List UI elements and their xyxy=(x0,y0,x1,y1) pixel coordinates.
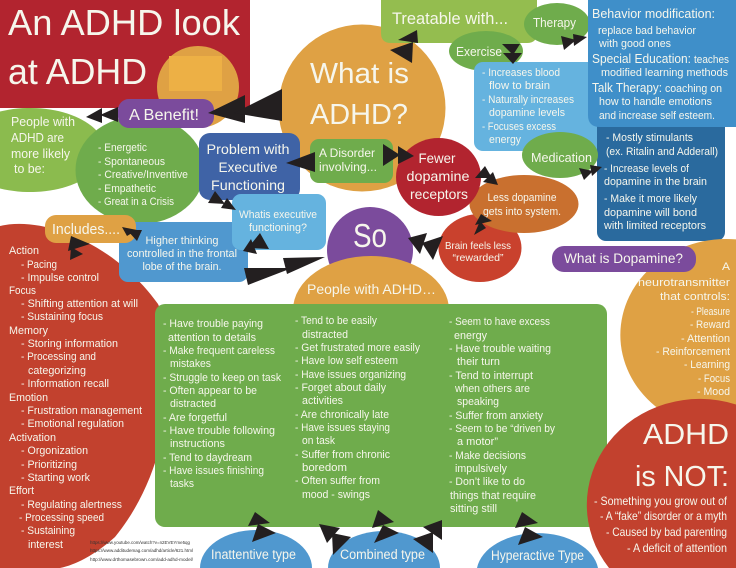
symptoms column: hyperactive: when others are xyxy=(454,383,530,395)
panel: red functions list: - Sustaining focus xyxy=(21,311,103,323)
symptoms column: combined: - Have issues organizing xyxy=(295,369,406,381)
panel: therapy types xyxy=(588,0,736,127)
bubble: less dopamine xyxy=(470,175,578,233)
arrow: brain to so xyxy=(408,233,443,260)
panel: a disorder involving xyxy=(310,139,393,183)
panel: red functions list: Focus xyxy=(9,285,36,297)
panel: therapy types: Talk Therapy: xyxy=(592,80,662,95)
panel: red functions list: - Emotional regulation xyxy=(21,418,124,430)
panel: red functions list: - Orgonization xyxy=(21,445,88,457)
panel: neurotransmitter list: - Focus xyxy=(698,373,730,385)
bubble: brain feels less rewarded: “rewarded” xyxy=(452,252,504,264)
panel: red functions list: Effort xyxy=(9,485,35,497)
symptoms column: combined: on task xyxy=(302,435,335,447)
arrow: higher thinking to so xyxy=(244,257,325,285)
panel: therapy types: Behavior modification: xyxy=(592,6,715,21)
arrow: medication to details xyxy=(579,165,602,180)
panel: higher thinking: Higher thinking xyxy=(146,235,218,247)
panel: medication details xyxy=(597,115,725,241)
symptoms column: inattentive: - Make frequent careless xyxy=(163,345,275,357)
arrow: combined to hyperactive column xyxy=(413,520,442,553)
panel: red functions list: - Prioritizing xyxy=(21,459,77,471)
bubble: hyperactive type xyxy=(477,533,598,568)
panel: medication details: with limited receptors xyxy=(603,220,706,232)
panel: medication details: - Increase levels of xyxy=(604,163,690,175)
bubble: inattentive type: Inattentive type xyxy=(211,547,296,562)
panel: red functions list: - Impulse control xyxy=(21,272,99,284)
symptoms column: inattentive: - Have trouble following xyxy=(163,425,275,437)
panel: therapy types: replace bad behavior xyxy=(598,25,696,37)
arrow: inattentive to symptoms xyxy=(248,512,276,542)
symptoms column: inattentive: - Are forgetful xyxy=(163,412,227,424)
symptoms column: inattentive: - Have trouble paying xyxy=(163,318,263,330)
panel: problem with executive functioning: Problem with xyxy=(206,141,290,157)
symptoms column: inattentive: - Often appear to be xyxy=(163,385,257,397)
bubble: fewer dopamine receptors: receptors xyxy=(410,186,468,202)
bubble: so: So xyxy=(353,217,387,254)
panel: traits list: - Great in a Crisis xyxy=(98,196,174,208)
panel: symptoms xyxy=(155,304,607,527)
panel: neurotransmitter list: - Learning xyxy=(684,359,730,371)
arrow: combined to inattentive column xyxy=(319,524,351,555)
arrow: executive functioning question xyxy=(208,191,236,210)
panel: red functions list: - Information recall xyxy=(21,378,109,390)
panel: exercise benefits: energy xyxy=(489,134,521,146)
symptoms column: inattentive: instructions xyxy=(170,438,225,450)
panel: what is ADHD: ADHD? xyxy=(310,99,408,131)
label: what is dopamine xyxy=(552,246,696,272)
symptoms column: combined: boredom xyxy=(302,462,347,474)
bubble: fewer dopamine receptors xyxy=(396,138,481,216)
arrow: disorder to executive functioning xyxy=(286,152,315,172)
panel: neurotransmitter list: - Reinforcement xyxy=(656,346,731,358)
bubble: inattentive type xyxy=(200,530,312,568)
panel: medication details: (ex. Ritalin and Adderall) xyxy=(606,146,718,158)
panel: a disorder involving: involving... xyxy=(319,162,377,174)
arrow: question to higher thinking xyxy=(243,233,269,254)
symptoms column: combined xyxy=(295,315,420,501)
symptoms column: inattentive: - Tend to daydream xyxy=(163,452,252,464)
bubble: fewer dopamine receptors: Fewer xyxy=(418,150,456,166)
panel: red functions list: - Frustration management xyxy=(21,405,143,417)
panel: traits list: - Creative/Inventive xyxy=(98,169,188,181)
panel: people with ADHD are more likely to be: ADHD are xyxy=(11,131,64,145)
panel: traits list: - Spontaneous xyxy=(98,156,165,168)
symptoms column: hyperactive: - Make decisions xyxy=(449,450,526,462)
panel: higher thinking: lobe of the brain. xyxy=(142,261,222,273)
panel: people with ADHD are more likely to be: to be: xyxy=(14,162,45,176)
bubble: fewer dopamine receptors: dopamine xyxy=(406,168,470,184)
arrow: combined to column center xyxy=(372,510,399,543)
panel: ADHD is not: is NOT: xyxy=(635,461,729,493)
source links: http://www.drthomasebrown.com/add-adhd-model/ xyxy=(90,557,194,562)
bubble: people with ADHD xyxy=(293,256,449,364)
arrow: hyperactive to symptoms xyxy=(515,512,543,545)
panel: medication details: - Make it more likely xyxy=(604,193,697,205)
symptoms column: combined: - Suffer from chronic xyxy=(295,449,390,461)
symptoms column: inattentive: tasks xyxy=(170,478,194,490)
arrow: exercise to benefits xyxy=(502,44,522,64)
panel: what is executive functioning: Whatis executive xyxy=(239,209,317,221)
symptoms column: hyperactive: - Suffer from anxiety xyxy=(449,410,543,422)
label: a benefit xyxy=(118,99,214,128)
panel: red functions list: - Processing and xyxy=(21,351,96,363)
symptoms column: hyperactive: sitting still xyxy=(450,503,497,515)
bubble: so xyxy=(327,207,413,293)
bubble: less dopamine: Less dopamine xyxy=(488,192,556,204)
symptoms column: hyperactive: - Have trouble waiting xyxy=(449,343,551,355)
source links xyxy=(90,540,194,562)
symptoms column: hyperactive: a motor” xyxy=(457,436,498,448)
panel: red functions list: Action xyxy=(9,245,39,257)
panel: therapy types: and increase self esteem. xyxy=(599,110,715,122)
bubble: brain feels less rewarded: Brain feels less xyxy=(445,240,511,252)
symptoms column: hyperactive: energy xyxy=(454,330,487,342)
panel: exercise benefits: - Naturally increases xyxy=(482,94,574,106)
symptoms column: inattentive: - Have issues finishing xyxy=(163,465,264,477)
panel: red functions list: interest xyxy=(28,539,64,551)
label: what is dopamine: What is Dopamine? xyxy=(564,250,683,266)
panel: neurotransmitter list: - Attention xyxy=(681,333,730,345)
symptoms column: combined: - Have issues staying xyxy=(295,422,390,434)
panel: higher thinking xyxy=(119,222,248,282)
panel: neurotransmitter list xyxy=(620,239,736,431)
arrow: includes to higher thinking xyxy=(122,227,142,241)
panel: exercise benefits xyxy=(474,62,604,151)
panel: problem with executive functioning xyxy=(199,133,300,200)
panel: red functions list: - Storing information xyxy=(21,338,118,350)
symptoms column: inattentive: - Struggle to keep on task xyxy=(163,372,281,384)
panel: red functions list: Emotion xyxy=(9,392,48,404)
panel: medication details: - Mostly stimulants xyxy=(606,132,693,144)
panel: neurotransmitter list: - Mood xyxy=(697,386,730,398)
symptoms column: combined: mood - swings xyxy=(302,489,370,501)
panel: people with ADHD are more likely to be: more likely xyxy=(11,147,71,161)
arrow: includes to red list xyxy=(68,236,90,260)
panel: therapy types: with good ones xyxy=(598,38,671,50)
bubble: therapy: Therapy xyxy=(533,16,577,30)
panel: neurotransmitter list: A xyxy=(722,261,730,273)
bubble: hyperactive type: Hyperactive Type xyxy=(491,548,584,563)
panel: ADHD is not: - A deficit of attention xyxy=(627,541,727,555)
panel: ADHD is not xyxy=(587,399,736,568)
panel: red functions list: - Processing speed xyxy=(19,512,104,524)
symptoms column: inattentive xyxy=(163,318,281,490)
panel: therapy types: teaches xyxy=(694,54,729,66)
bubble: combined type xyxy=(328,531,440,568)
source links: https://www.youtube.com/watch?v=n2EVEYme5qg xyxy=(90,540,190,545)
panel: what is ADHD: What is xyxy=(310,58,409,90)
panel: traits list: - Energetic xyxy=(98,142,147,154)
symptoms column: hyperactive: - Seem to have excess xyxy=(449,316,550,328)
symptoms column: combined: activities xyxy=(302,395,343,407)
symptoms column: combined: - Forget about daily xyxy=(295,382,386,394)
arrow: fewer receptors to less dopamine xyxy=(475,166,498,185)
panel: a disorder involving: A Disorder xyxy=(319,148,375,160)
symptoms column: inattentive: mistakes xyxy=(170,358,211,370)
symptoms column: inattentive: attention to details xyxy=(168,332,256,344)
panel: red functions list: - Shifting attention at will xyxy=(21,298,138,310)
panel: problem with executive functioning: Executive xyxy=(218,159,278,175)
symptoms column: combined: - Tend to be easily xyxy=(295,315,377,327)
panel: what is ADHD xyxy=(278,24,446,192)
panel: what is executive functioning xyxy=(232,194,326,250)
arrow: a benefit to people with ADHD xyxy=(86,107,118,123)
panel: medication details: dopamine in the brain xyxy=(604,176,707,188)
source links: https://www.additudemag.com/adhd/article/621.html xyxy=(90,548,193,553)
arrow: less dopamine to brain xyxy=(474,214,492,235)
title panel xyxy=(0,0,250,128)
panel: therapy types: coaching on xyxy=(665,83,722,95)
panel: traits list: - Empathetic xyxy=(98,183,156,195)
symptoms column: hyperactive xyxy=(449,316,555,515)
bubble: exercise: Exercise xyxy=(456,45,502,59)
arrow: disorder to fewer receptors xyxy=(383,144,414,166)
bubble: combined type: Combined type xyxy=(340,547,425,562)
panel: exercise benefits: - Focuses excess xyxy=(482,121,556,133)
panel: neurotransmitter list: that controls: xyxy=(660,291,730,303)
panel: medication details: dopamine will bond xyxy=(604,207,697,219)
symptoms column: hyperactive: speaking xyxy=(457,396,499,408)
panel: neurotransmitter list: - Reward xyxy=(690,319,730,331)
arrow: therapy to therapy types xyxy=(561,34,587,50)
label: includes xyxy=(45,215,136,243)
symptoms column: hyperactive: things that require xyxy=(450,490,536,502)
panel: traits list xyxy=(76,116,204,224)
label: includes: Includes.... xyxy=(52,222,120,238)
panel: higher thinking: controlled in the frontal xyxy=(127,248,237,260)
symptoms column: hyperactive: - Seem to be “driven by xyxy=(449,423,555,435)
panel: red functions list: Activation xyxy=(9,432,56,444)
panel: people with ADHD are more likely to be: People with xyxy=(11,115,75,129)
symptoms column: combined: - Are chronically late xyxy=(295,409,389,421)
panel: treatable with: Treatable with... xyxy=(392,9,508,28)
panel: red functions list: - Starting work xyxy=(21,472,90,484)
symptoms column: hyperactive: - Don’t like to do xyxy=(449,476,525,488)
symptoms column: combined: - Often suffer from xyxy=(295,475,380,487)
bubble: medication xyxy=(522,132,598,178)
panel: exercise benefits: flow to brain xyxy=(489,80,550,92)
bubble: therapy xyxy=(524,3,590,45)
panel: red functions list: Memory xyxy=(9,325,48,337)
panel: therapy types: Special Education: xyxy=(592,51,691,66)
panel: red functions list: - Pacing xyxy=(21,259,57,271)
panel: treatable with xyxy=(381,0,537,43)
symptoms column: combined: distracted xyxy=(302,329,348,341)
symptoms column: hyperactive: impulsively xyxy=(455,463,507,475)
panel: therapy types: modified learning methods xyxy=(601,67,728,79)
panel: people with ADHD are more likely to be xyxy=(0,108,105,192)
label: a benefit: A Benefit! xyxy=(129,107,199,124)
panel: ADHD is not: ADHD xyxy=(643,419,729,451)
panel: what is executive functioning: functioning? xyxy=(249,222,307,234)
panel: exercise benefits: dopamine levels xyxy=(489,107,565,119)
arrow: what is ADHD to treatable xyxy=(390,30,418,63)
panel: exercise benefits: - Increases blood xyxy=(482,67,560,79)
panel: neurotransmitter list: neurotransmitter xyxy=(638,277,730,289)
bubble: medication: Medication xyxy=(531,150,592,165)
symptoms column: combined: - Have low self esteem xyxy=(295,355,398,367)
title panel: An ADHD look xyxy=(8,2,241,43)
symptoms column: hyperactive: - Tend to interrupt xyxy=(449,370,534,382)
symptoms column: combined: - Get frustrated more easily xyxy=(295,342,420,354)
panel: therapy types: how to handle emotions xyxy=(599,96,712,108)
bubble: people with ADHD: People with ADHD… xyxy=(307,282,436,297)
symptoms column: hyperactive: their turn xyxy=(457,356,500,368)
title panel: at ADHD xyxy=(8,51,147,92)
symptoms column: inattentive: distracted xyxy=(170,398,216,410)
bubble: less dopamine: gets into system. xyxy=(483,206,561,218)
panel: red functions list xyxy=(0,224,170,568)
panel: red functions list: - Regulating alertness xyxy=(21,499,122,511)
bubble: exercise xyxy=(449,31,523,71)
arrow: what is ADHD to a benefit xyxy=(208,89,282,123)
panel: problem with executive functioning: Functioning xyxy=(211,177,285,193)
panel: red functions list: categorizing xyxy=(28,365,86,377)
panel: red functions list: - Sustaining xyxy=(21,525,75,537)
bubble: brain feels less rewarded xyxy=(438,214,522,282)
